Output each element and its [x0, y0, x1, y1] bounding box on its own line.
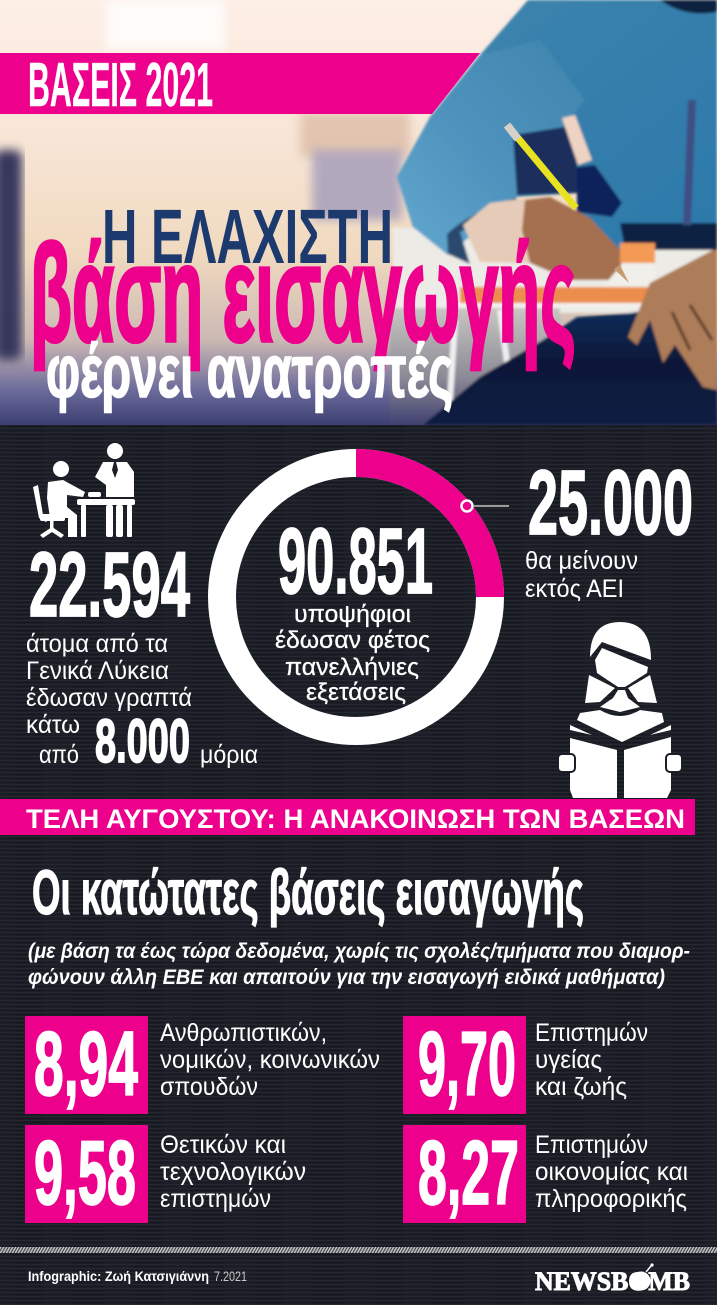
score card: sciences and technology — [25, 1123, 306, 1224]
score card: health sciences: Επιστημών — [535, 1019, 648, 1047]
stat: 22.594 — [26, 534, 258, 775]
stat: 22.594: 8.000 — [95, 707, 190, 775]
donut chart: 25.000 of 90.851: πανελλήνιες — [285, 654, 419, 681]
donut chart: 25.000 of 90.851: 90.851 — [278, 509, 433, 613]
stat: 25.000: θα μείνουν — [525, 547, 638, 575]
stat: 22.594: έδωσαν γραπτά — [26, 684, 192, 712]
hero headline — [30, 194, 576, 413]
stat: 22.594: Γενικά Λύκεια — [26, 657, 169, 685]
footer credit: Infographic: Ζωή Κατσιγιάννη — [28, 1268, 209, 1284]
section note: φώνουν άλλη ΕΒΕ και απαιτούν για την εισαγωγή ειδικά μαθήματα) — [28, 966, 665, 989]
score card: economics and informatics: πληροφορικής — [535, 1185, 687, 1213]
score card: sciences and technology: τεχνολογικών — [160, 1158, 306, 1186]
icon: office people at desk — [33, 443, 135, 538]
score card: economics and informatics: οικονομίας και — [535, 1158, 688, 1186]
score card: sciences and technology: Θετικών και — [160, 1131, 286, 1159]
score card: health sciences: 9,70 — [418, 1014, 516, 1115]
stat: 22.594: 22.594 — [29, 534, 190, 636]
logo: NEWSBOMB: NEWSBOMB — [535, 1267, 690, 1296]
score card: health sciences: υγείας — [535, 1046, 602, 1074]
hero headline: Η ΕΛΑΧΙΣΤΗ — [102, 194, 393, 280]
stat: 25.000 — [525, 452, 693, 603]
banner: announcement date: ΤΕΛΗ ΑΥΓΟΥΣΤΟΥ: Η ΑΝΑΚΟΙΝΩΣΗ ΤΩΝ ΒΑΣΕΩΝ — [26, 804, 685, 834]
donut chart: 25.000 of 90.851: έδωσαν φέτος — [275, 627, 430, 654]
score card: humanities — [25, 1014, 380, 1115]
section note — [28, 940, 690, 989]
score card: economics and informatics — [403, 1123, 688, 1224]
donut chart: 25.000 of 90.851: εξετάσεις — [306, 679, 406, 706]
hero photo: student writing an exam — [0, 0, 717, 425]
score card: economics and informatics: Επιστημών — [535, 1131, 648, 1159]
stat: 22.594: από — [39, 741, 79, 769]
stat: 22.594: μόρια — [200, 741, 258, 769]
hero headline: φέρνει ανατροπές — [46, 329, 453, 413]
footer credit: 7.2021 — [214, 1268, 247, 1284]
stat: 22.594: κάτω — [26, 711, 80, 739]
score card: health sciences: και ζωής — [535, 1073, 627, 1101]
icon: woman reading a book — [558, 622, 682, 798]
header banner: ΒΑΣΕΙΣ 2021: ΒΑΣΕΙΣ 2021 — [28, 51, 213, 120]
score card: humanities: 8,94 — [34, 1014, 138, 1115]
donut chart: 25.000 of 90.851 — [222, 463, 509, 731]
score card: humanities: σπουδών — [160, 1073, 258, 1101]
score card: humanities: νομικών, κοινωνικών — [160, 1046, 380, 1074]
stat: 25.000: εκτός ΑΕΙ — [525, 575, 624, 603]
score card: sciences and technology: 9,58 — [34, 1123, 136, 1224]
score card: humanities: Ανθρωπιστικών, — [160, 1019, 327, 1047]
score card: sciences and technology: επιστημών — [160, 1185, 271, 1213]
stat: 22.594: άτομα από τα — [26, 630, 168, 658]
dark textured background — [0, 425, 717, 1305]
donut chart: 25.000 of 90.851: υποψήφιοι — [294, 601, 411, 628]
score card: economics and informatics: 8,27 — [418, 1123, 519, 1224]
